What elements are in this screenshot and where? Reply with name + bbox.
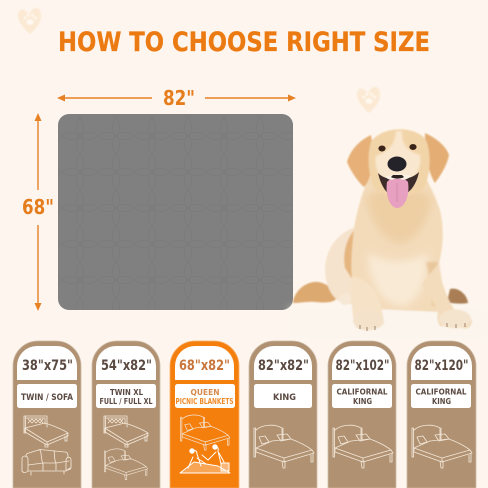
icon: second bed bbox=[104, 449, 148, 480]
far back paw bbox=[447, 289, 468, 304]
left foreleg and paw bbox=[351, 277, 384, 330]
height dimension: arrow and 68 inch label bbox=[22, 113, 54, 311]
use label bbox=[332, 384, 392, 408]
size value: 38"x75" bbox=[22, 358, 73, 374]
size card: 68x82 queen highlighted bbox=[170, 341, 239, 488]
icon: paw heart top left bbox=[18, 8, 41, 34]
size value: 82"x102" bbox=[336, 358, 390, 374]
size value: 82"x120" bbox=[414, 358, 468, 374]
use label: FULL / FULL XL bbox=[100, 397, 152, 406]
use label bbox=[17, 384, 77, 408]
width dimension: arrow and 82 inch label bbox=[57, 86, 296, 110]
icon: sofa bbox=[22, 450, 71, 475]
size value bbox=[96, 346, 156, 380]
chest and body bbox=[351, 178, 443, 312]
icon: bed bbox=[24, 416, 68, 447]
dog illustration bbox=[290, 129, 488, 338]
mouth and tongue bbox=[378, 172, 419, 193]
right ear bbox=[425, 133, 449, 183]
small back paw bbox=[339, 293, 351, 305]
face highlight bbox=[376, 131, 420, 184]
size value: 82"x82" bbox=[258, 358, 309, 374]
tail bbox=[293, 282, 338, 303]
use label: KING bbox=[273, 393, 296, 403]
product mat bbox=[58, 114, 293, 310]
icon: bed bbox=[104, 416, 148, 447]
title: HOW TO CHOOSE RIGHT SIZE bbox=[58, 27, 430, 58]
size value bbox=[332, 346, 392, 380]
use label: CALIFORNAL bbox=[416, 388, 466, 396]
floor highlight bbox=[290, 308, 488, 338]
eyes bbox=[378, 146, 386, 152]
size value: 54"x82" bbox=[101, 358, 152, 374]
use label bbox=[254, 384, 312, 408]
size value: 68"x82" bbox=[179, 358, 230, 374]
size card: 82x102 california king bbox=[328, 341, 396, 488]
icon: bed bbox=[333, 425, 393, 468]
size value bbox=[411, 346, 472, 380]
use label: KING bbox=[353, 397, 372, 406]
icon: picnic scene bbox=[180, 445, 230, 473]
use label: TWIN XL bbox=[110, 388, 143, 397]
size value bbox=[175, 346, 234, 380]
size value bbox=[17, 346, 77, 380]
use label: KING bbox=[432, 397, 451, 406]
use label bbox=[175, 384, 235, 408]
nose bbox=[388, 156, 406, 172]
size value bbox=[254, 346, 312, 380]
size card: 38x75 twin sofa bbox=[13, 341, 81, 488]
paw toes bbox=[360, 323, 465, 331]
icon: bed bbox=[181, 415, 230, 450]
head bbox=[369, 129, 430, 196]
back haunch bbox=[325, 226, 372, 304]
icon: paw heart beside dog bbox=[357, 87, 380, 113]
height label: 68" bbox=[22, 195, 54, 219]
use label: QUEEN bbox=[190, 388, 220, 397]
size card: 82x120 california king bbox=[407, 341, 476, 488]
icon: bed bbox=[254, 425, 314, 468]
use label bbox=[411, 384, 471, 408]
use label: PICNIC BLANKETS bbox=[176, 397, 234, 406]
icon: bed bbox=[412, 425, 472, 468]
width label: 82" bbox=[163, 86, 195, 110]
use label: CALIFORNAL bbox=[336, 388, 388, 396]
use label: TWIN / SOFA bbox=[21, 393, 73, 403]
size card: 82x82 king bbox=[249, 341, 317, 488]
size card: 54x82 twin xl bbox=[92, 341, 160, 488]
right foreleg and paw bbox=[422, 264, 472, 329]
use label bbox=[96, 384, 156, 408]
left ear bbox=[347, 135, 374, 187]
